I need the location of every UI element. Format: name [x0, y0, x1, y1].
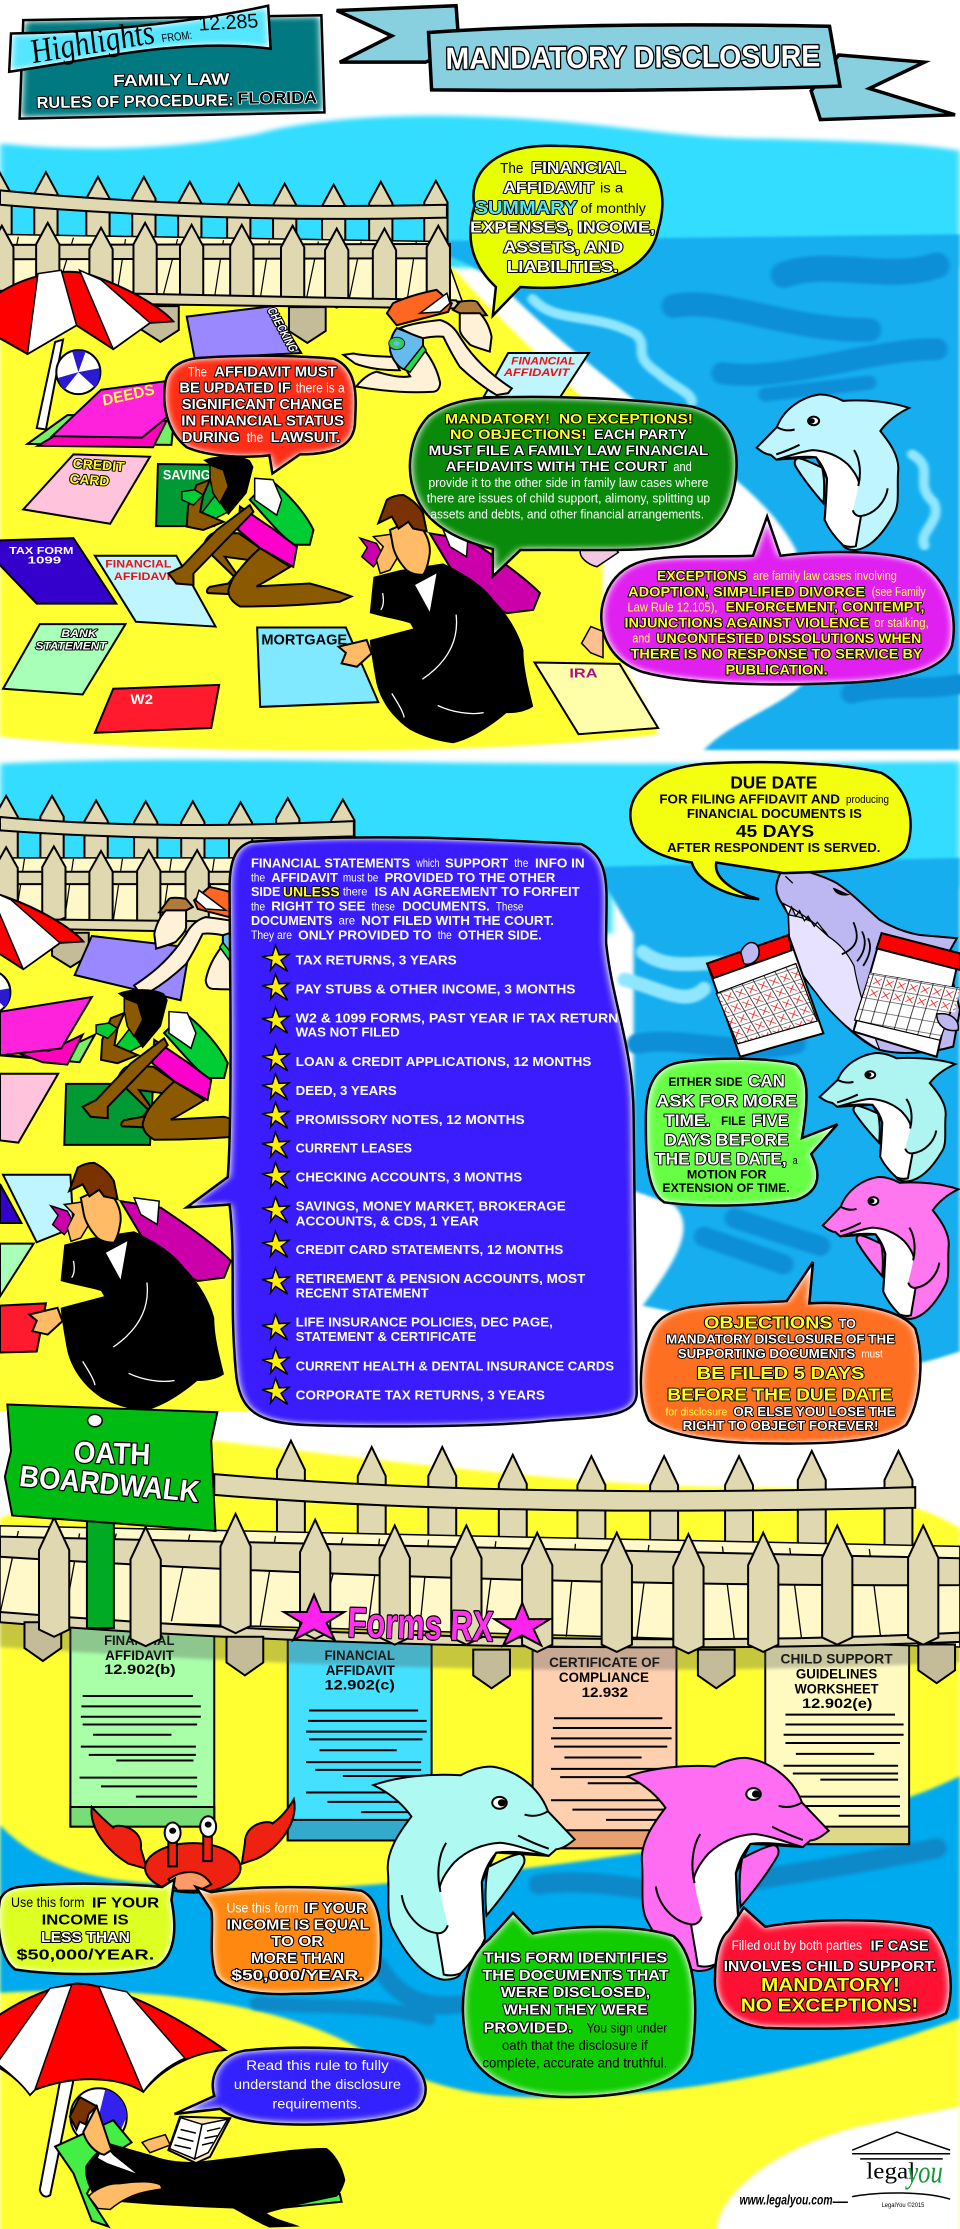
bubble: ask for more time — [646, 1059, 837, 1206]
bubble: mandatory no exceptions: and — [673, 461, 692, 475]
fence — [0, 172, 462, 343]
document checklist: WAS NOT FILED — [296, 1026, 400, 1040]
intro paragraph: the — [514, 856, 528, 870]
form: financial affidavit 12.902(c) — [288, 1639, 432, 1841]
bubble: this form identifies documents — [463, 1913, 695, 2097]
doc: bank statement: BANK — [61, 627, 98, 640]
form: child support guidelines worksheet 12.902(e) — [765, 1644, 909, 1844]
bubble: affidavit must be updated: The — [188, 365, 207, 380]
section 3: oath boardwalk and forms — [0, 1405, 960, 2229]
document checklist: PAY STUBS & OTHER INCOME, 3 MONTHS — [296, 982, 575, 997]
water background — [594, 858, 960, 1363]
large umbrella — [0, 1983, 225, 2197]
header badge: highlights: 12.285 — [197, 9, 259, 35]
doc: mortgage: MORTGAGE — [261, 632, 347, 648]
document checklist: RETIREMENT & PENSION ACCOUNTS, MOST — [296, 1272, 586, 1287]
forms hanging from boardwalk — [70, 1624, 909, 1848]
bubble: affidavit must be updated: LAWSUIT. — [271, 430, 340, 445]
title banner: mandatory disclosure — [337, 6, 955, 120]
form: financial affidavit 12.902(b): AFFIDAVIT — [105, 1649, 174, 1664]
logo: legalyou: LegalYou ©2015 — [882, 2201, 925, 2209]
bubble: income less than 50,000: $50,000/YEAR. — [17, 1948, 154, 1963]
doc: ira — [534, 662, 658, 734]
bubble: affidavit must be updated: the — [247, 431, 263, 445]
doc: financial affidavit: AFFIDAVI — [114, 570, 170, 583]
bubble: due date: 45 DAYS — [736, 822, 814, 841]
doc: credit card: CREDIT — [72, 457, 126, 475]
doc: bank statement: STATEMENT — [36, 639, 107, 652]
dolphin: pink large — [628, 1758, 829, 1971]
form: financial affidavit 12.902(b): FINANCIAL — [104, 1634, 174, 1649]
intro paragraph: UNLESS — [283, 885, 340, 900]
bubble: affidavit must be updated — [164, 356, 356, 474]
intro paragraph: are — [339, 913, 355, 927]
bubble: income less than 50,000: IF YOUR — [92, 1896, 160, 1911]
sky and water background — [0, 116, 960, 750]
bubble: financial affidavit summary: of monthly — [580, 202, 646, 216]
bubble: ask for more time: MOTION FOR — [687, 1167, 766, 1181]
document checklist: STATEMENT & CERTIFICATE — [296, 1330, 476, 1344]
bubble: income equal or more than 50,000: Use this form — [227, 1901, 299, 1916]
section 1: financial affidavit beach — [0, 6, 960, 751]
bubble: child support mandatory: INVOLVES CHILD SUPPORT. — [724, 1959, 937, 1975]
bubble: this form identifies documents: You sign under — [586, 2022, 667, 2036]
intro paragraph: DOCUMENTS. — [402, 900, 490, 914]
intro paragraph: must be — [343, 870, 378, 884]
intro paragraph: PROVIDED TO THE OTHER — [384, 871, 555, 885]
character: woman in pink swimsuit — [83, 989, 266, 1140]
logo: legalyou — [852, 2132, 950, 2209]
intro paragraph: SIDE — [251, 885, 280, 899]
form: child support guidelines worksheet 12.902(e): 12.902(e) — [802, 1697, 872, 1712]
bubble: income equal or more than 50,000 — [196, 1887, 381, 1994]
intro paragraph: these — [372, 899, 395, 913]
bubble: mandatory no exceptions: AFFIDAVITS WITH THE COURT — [446, 460, 668, 475]
bubble: child support mandatory: IF CASE — [871, 1939, 929, 1954]
character: woman in blue swimsuit — [343, 290, 512, 395]
intro paragraph: RIGHT TO SEE — [271, 900, 365, 914]
bubble: exceptions: ADOPTION, SIMPLIFIED DIVORCE — [628, 585, 865, 600]
bubble: objections: OR ELSE YOU LOSE THE — [733, 1405, 896, 1419]
header badge: highlights: Highlights — [25, 13, 159, 71]
sky background — [0, 760, 960, 934]
document checklist: CREDIT CARD STATEMENTS, 12 MONTHS — [296, 1243, 563, 1258]
bubble: financial affidavit summary: ASSETS, AND — [503, 239, 623, 256]
document checklist: LIFE INSURANCE POLICIES, DEC PAGE, — [296, 1316, 553, 1330]
bubble: due date: DUE DATE — [730, 773, 817, 793]
bubble: ask for more time: DAYS BEFORE — [664, 1131, 789, 1150]
form: financial affidavit 12.902(c): FINANCIAL — [324, 1649, 395, 1664]
bubble: exceptions: or stalking, — [874, 617, 929, 631]
bubble: objections: must — [861, 1347, 883, 1360]
bubble: financial affidavit summary: FINANCIAL — [531, 159, 626, 177]
bubble: ask for more time: CAN — [748, 1072, 785, 1091]
intro paragraph: NOT FILED WITH THE COURT. — [361, 914, 554, 928]
document checklist: CURRENT LEASES — [296, 1142, 412, 1156]
header badge: highlights — [9, 6, 324, 119]
intro paragraph: there — [343, 885, 367, 898]
bubble: this form identifies documents: complete, accurate and truthful. — [482, 2057, 667, 2071]
bubble: this form identifies documents: WERE DISCLOSED, — [501, 1984, 650, 2001]
bubble: objections: OBJECTIONS — [704, 1313, 833, 1333]
doc: w2: W2 — [130, 693, 153, 708]
bubble: exceptions: are family law cases involving — [753, 570, 897, 584]
bubble: income less than 50,000: LESS THAN — [41, 1930, 130, 1946]
panel: financial statements list — [187, 837, 637, 1426]
form: financial affidavit 12.902(b) — [70, 1624, 214, 1827]
intro paragraph: which — [416, 856, 440, 870]
bubble: mandatory no exceptions: provide it to the other side in family law cases where — [429, 476, 708, 490]
form: child support guidelines worksheet 12.902(e): WORKSHEET — [795, 1683, 879, 1697]
intro paragraph — [251, 856, 585, 943]
doc: savings — [156, 464, 220, 526]
fence — [0, 796, 354, 967]
bubble: affidavit must be updated: BE UPDATED IF — [179, 380, 291, 396]
bubble: mandatory no exceptions: assets and debts, and other financial arrangements. — [430, 508, 704, 522]
boardwalk fence — [0, 1441, 960, 1688]
bubble: objections: RIGHT TO OBJECT FOREVER! — [683, 1419, 879, 1433]
bubble: exceptions: Law Rule 12.105), — [628, 601, 717, 615]
bubble: child support mandatory: Filled out by both parties — [732, 1939, 862, 1954]
bubble: ask for more time: FIVE — [752, 1112, 789, 1130]
dolphin: cyan large — [373, 1767, 575, 1980]
document checklist: ACCOUNTS, & CDS, 1 YEAR — [296, 1214, 479, 1229]
dolphin: pink — [823, 1177, 958, 1319]
bubble: objections: BE FILED 5 DAYS — [697, 1364, 864, 1383]
bubble: objections: MANDATORY DISCLOSURE OF THE — [666, 1332, 895, 1347]
crab — [91, 1799, 295, 1893]
document checklist: TAX RETURNS, 3 YEARS — [296, 953, 457, 968]
bubble: income less than 50,000 — [0, 1879, 174, 1974]
logo: legalyou: legal — [866, 2159, 915, 2184]
bubble: affidavit must be updated: DURING — [182, 430, 240, 445]
seashell — [580, 544, 618, 567]
document checklist — [296, 953, 618, 1403]
bubble: mandatory no exceptions: MANDATORY! NO EXCEPTIONS! — [445, 412, 693, 427]
beach sand — [0, 918, 257, 1411]
sign: oath boardwalk: OATH — [73, 1435, 151, 1471]
bubble: financial affidavit summary — [470, 146, 662, 316]
intro paragraph: the — [251, 870, 265, 884]
doc: checking: CHECKING — [264, 306, 300, 354]
doc: financial affidavit top: AFFIDAVIT — [503, 365, 570, 379]
bubble: income equal or more than 50,000: TO OR — [271, 1934, 324, 1949]
bubble: due date: FOR FILING AFFIDAVIT AND — [659, 792, 840, 807]
bubble: affidavit must be updated: IN FINANCIAL STATUS — [181, 413, 344, 429]
doc: checking — [187, 306, 301, 359]
intro paragraph: OTHER SIDE. — [458, 929, 542, 943]
document checklist: CORPORATE TAX RETURNS, 3 YEARS — [296, 1388, 545, 1403]
bubble: due date — [630, 762, 911, 899]
bubble: read this rule: requirements. — [272, 2096, 361, 2112]
doc: tax form 1099 — [0, 538, 116, 604]
document checklist: LOAN & CREDIT APPLICATIONS, 12 MONTHS — [296, 1055, 591, 1069]
document checklist: CHECKING ACCOUNTS, 3 MONTHS — [296, 1171, 522, 1185]
bubble: child support mandatory: MANDATORY! — [761, 1976, 900, 1996]
bubble: due date: AFTER RESPONDENT IS SERVED. — [667, 841, 880, 855]
bubble: exceptions: EXCEPTIONS — [657, 569, 747, 584]
form: certificate of compliance 12.932: COMPLIANCE — [559, 1671, 649, 1686]
doc: w2 — [95, 685, 219, 733]
bubble: mandatory no exceptions: NO OBJECTIONS! — [450, 428, 586, 443]
doc: tax form 1099: TAX FORM — [9, 546, 73, 556]
character: person in black robe — [339, 495, 540, 743]
bubble: affidavit must be updated: there is a — [296, 381, 345, 396]
doc: credit card: CARD — [69, 472, 110, 489]
intro paragraph: INFO IN — [535, 857, 585, 871]
intro paragraph: FINANCIAL STATEMENTS — [251, 857, 410, 871]
bubble: income equal or more than 50,000: $50,000/YEAR. — [231, 1968, 364, 1984]
bubble: read this rule: Read this rule to fully — [246, 2058, 389, 2074]
bubble: income equal or more than 50,000: MORE THAN — [251, 1951, 344, 1966]
bubble: financial affidavit summary: AFFIDAVIT — [503, 179, 594, 197]
bubble: affidavit must be updated: SIGNIFICANT CHANGE — [182, 397, 343, 412]
bubble: ask for more time: FILE — [721, 1114, 746, 1128]
intro paragraph: the — [438, 928, 452, 942]
bubble: financial affidavit summary: EXPENSES, INCOME, — [470, 219, 655, 236]
bubble: child support mandatory — [715, 1908, 951, 2029]
documents on the sand — [0, 936, 190, 1352]
bubble: child support mandatory: NO EXCEPTIONS! — [741, 1996, 918, 2016]
character: person in black robe — [29, 1163, 231, 1411]
bubble: ask for more time: TIME. — [664, 1112, 710, 1130]
sign: oath boardwalk: BOARDWALK — [18, 1459, 202, 1508]
header badge: highlights: FAMILY LAW — [113, 70, 230, 90]
character: woman in pink swimsuit — [168, 456, 351, 606]
bubble: ask for more time: EITHER SIDE — [669, 1075, 743, 1089]
intro paragraph: SUPPORT — [445, 857, 509, 871]
intro paragraph: IS AN AGREEMENT TO FORFEIT — [375, 885, 580, 899]
dolphin — [757, 395, 909, 550]
sand and water background — [0, 1441, 960, 2229]
bubble: financial affidavit summary: LIABILITIES. — [507, 258, 618, 276]
section 2: financial statements — [0, 760, 960, 1444]
bubble: exceptions: and — [632, 632, 650, 646]
document checklist: RECENT STATEMENT — [296, 1286, 429, 1301]
bubble: ask for more time: EXTENSION OF TIME. — [662, 1181, 790, 1195]
bubble: objections: TO — [839, 1317, 856, 1332]
bubble: mandatory no exceptions — [410, 397, 737, 576]
bubble: ask for more time: ASK FOR MORE — [656, 1092, 797, 1111]
intro paragraph: DOCUMENTS — [251, 914, 332, 928]
beach sand — [0, 268, 658, 751]
form: child support guidelines worksheet 12.902(e): CHILD SUPPORT — [781, 1653, 893, 1667]
bubble: income less than 50,000: INCOME IS — [42, 1913, 129, 1928]
heading: forms rx: Forms RX — [347, 1598, 494, 1650]
bubble: this form identifies documents: THIS FORM IDENTIFIES — [484, 1950, 667, 1966]
website url: www.legalyou.com — [740, 2193, 833, 2208]
doc: financial affidavit: FINANCIAL — [105, 557, 171, 570]
form: certificate of compliance 12.932: CERTIFICATE OF — [549, 1656, 660, 1671]
bubble: this form identifies documents: oath that the disclosure if — [502, 2039, 649, 2054]
title banner: mandatory disclosure: MANDATORY DISCLOSURE — [445, 39, 820, 76]
form: child support guidelines worksheet 12.902(e): GUIDELINES — [796, 1668, 877, 1682]
beach chair and reader — [55, 2088, 345, 2228]
umbrella and beach ball — [0, 270, 173, 430]
bubble: financial affidavit summary: SUMMARY — [474, 198, 577, 218]
intro paragraph: the — [251, 899, 265, 913]
doc: ira: IRA — [569, 667, 598, 681]
bubble: financial affidavit summary: The — [500, 161, 523, 177]
boardwalk shadow — [0, 1619, 960, 1670]
shark with calendars — [707, 867, 960, 1057]
bubble: this form identifies documents: THE DOCUMENTS THAT — [482, 1967, 669, 1984]
bubble: mandatory no exceptions: there are issues of child support, alimony, splitting up — [427, 492, 710, 506]
doc: tax form 1099: 1099 — [28, 556, 61, 566]
doc: bank statement — [3, 624, 126, 694]
bubble: income equal or more than 50,000: IF YOUR — [304, 1901, 368, 1916]
umbrella — [0, 890, 83, 1050]
header badge: highlights: FLORIDA — [237, 88, 317, 107]
bubble: due date: FINANCIAL DOCUMENTS IS — [687, 807, 862, 821]
heading: forms rx — [284, 1595, 550, 1650]
bubble: mandatory no exceptions: EACH PARTY — [594, 428, 687, 443]
bubble: objections: for disclosure — [665, 1405, 727, 1418]
bubble: due date: producing — [846, 793, 889, 805]
bubble: income less than 50,000: Use this form — [11, 1896, 84, 1911]
star bullets — [262, 945, 289, 1404]
bubble: this form identifies documents: PROVIDED. — [484, 2020, 572, 2036]
bubble: exceptions: INJUNCTIONS AGAINST VIOLENCE — [624, 616, 869, 631]
bubble: ask for more time: a — [793, 1154, 798, 1167]
bubble: exceptions: (see Family — [872, 586, 926, 599]
bubble: income equal or more than 50,000: INCOME IS EQUAL — [227, 1917, 369, 1933]
header badge: highlights: RULES OF PROCEDURE: — [36, 91, 234, 112]
bubble: read this rule: understand the disclosure — [234, 2077, 401, 2093]
bubble: this form identifies documents: WHEN THEY WERE — [503, 2002, 648, 2018]
intro paragraph: These — [496, 899, 524, 913]
document checklist: DEED, 3 YEARS — [296, 1084, 397, 1098]
bubble: financial affidavit summary: is a — [600, 181, 624, 196]
doc: deeds — [28, 381, 174, 447]
header badge: highlights: FROM: — [160, 28, 193, 45]
form: financial affidavit 12.902(b): 12.902(b) — [104, 1663, 176, 1678]
doc: credit card — [23, 454, 150, 524]
intro paragraph: They are — [251, 928, 292, 942]
document checklist: SAVINGS, MONEY MARKET, BROKERAGE — [296, 1200, 566, 1214]
bubble: mandatory no exceptions: MUST FILE A FAMILY LAW FINANCIAL — [429, 444, 709, 458]
doc: deeds: DEEDS — [99, 381, 157, 409]
form: financial affidavit 12.902(c): 12.902(c) — [324, 1678, 395, 1693]
form: certificate of compliance 12.932 — [533, 1647, 676, 1848]
doc: financial affidavit — [95, 556, 215, 627]
doc: financial affidavit top: FINANCIAL — [511, 354, 575, 367]
bubble: exceptions — [601, 517, 954, 684]
sign: oath boardwalk — [5, 1405, 217, 1628]
bubble: exceptions: PUBLICATION. — [725, 663, 828, 678]
form: certificate of compliance 12.932: 12.932 — [582, 1686, 628, 1701]
bubble: objections: SUPPORTING DOCUMENTS — [678, 1347, 855, 1361]
doc: financial affidavit top — [484, 353, 589, 397]
document checklist: CURRENT HEALTH & DENTAL INSURANCE CARDS — [296, 1359, 614, 1374]
dolphin: cyan — [820, 1053, 955, 1181]
form: financial affidavit 12.902(c): AFFIDAVIT — [326, 1664, 395, 1679]
document checklist: PROMISSORY NOTES, 12 MONTHS — [296, 1113, 525, 1127]
document checklist: W2 & 1099 FORMS, PAST YEAR IF TAX RETURN — [296, 1011, 618, 1026]
bubble: objections: BEFORE THE DUE DATE — [667, 1385, 893, 1405]
character: woman in blue swimsuit — [134, 887, 302, 992]
starfish — [582, 627, 603, 658]
intro paragraph: ONLY PROVIDED TO — [298, 929, 432, 943]
bubble: affidavit must be updated: AFFIDAVIT MUST — [214, 364, 337, 380]
bubble: read this rule — [174, 2048, 426, 2125]
bubble: objections — [641, 1262, 920, 1444]
doc: mortgage — [257, 628, 378, 707]
doc: savings: SAVING — [163, 468, 211, 483]
intro paragraph: AFFIDAVIT — [271, 871, 339, 885]
bubble: ask for more time: THE DUE DATE, — [655, 1150, 787, 1169]
